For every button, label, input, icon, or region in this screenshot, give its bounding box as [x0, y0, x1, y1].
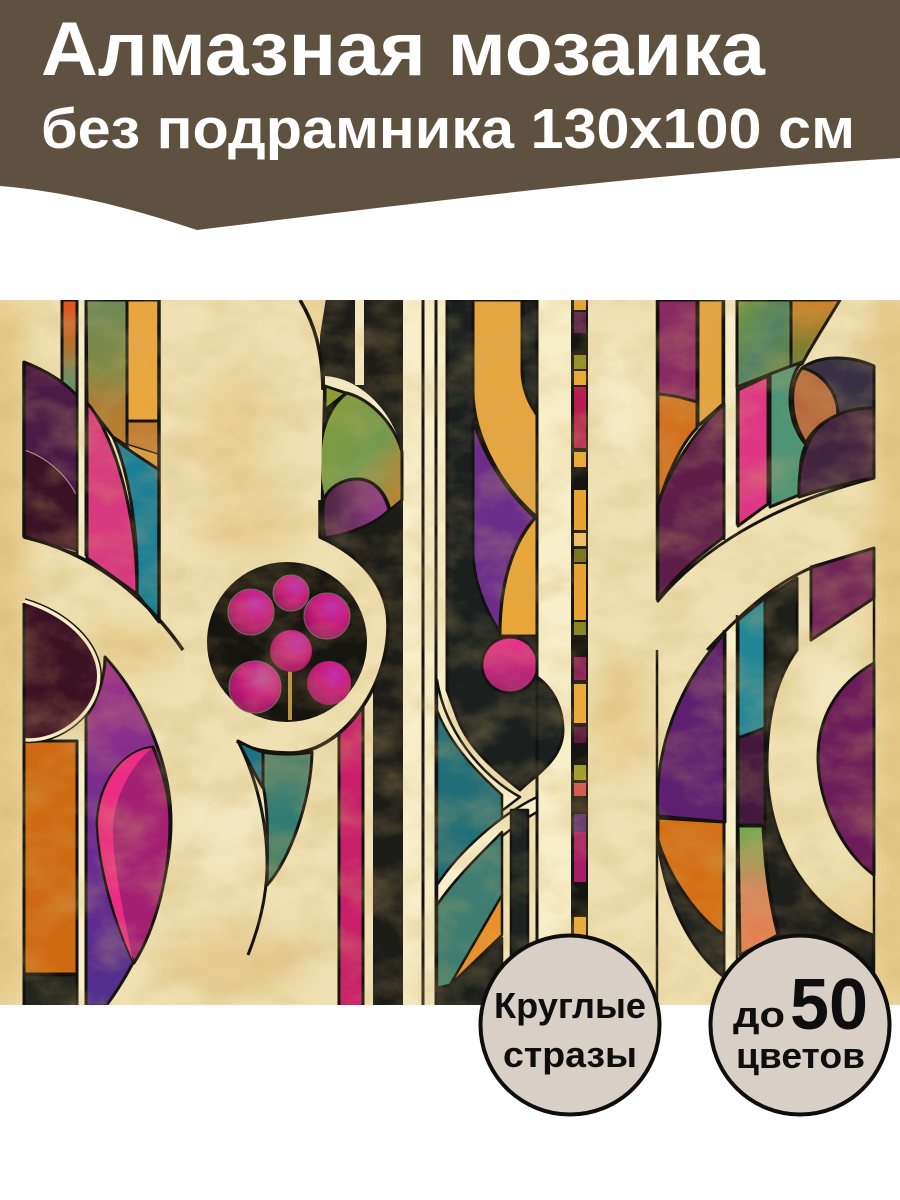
badge: round rhinestones: стразы — [503, 1034, 637, 1075]
centre lower teal and green panels — [437, 680, 537, 1010]
green arched shape with purple half-disc — [320, 376, 402, 538]
left cream panel fill — [318, 370, 323, 500]
badge: up to 50 colours: 50 — [790, 965, 868, 1045]
outlines of ring and cream panel — [24, 300, 388, 753]
badge: up to 50 colours: до — [733, 994, 785, 1035]
badge: round rhinestones: Круглые — [494, 985, 646, 1026]
berry stem — [288, 670, 292, 720]
cream ring around the berry medallion — [170, 539, 386, 732]
paper grain overlay — [0, 300, 900, 1005]
subtitle: без подрамника 130х100 см — [41, 97, 855, 161]
right lower shapes — [657, 300, 874, 1006]
badge: up to 50 colours: цветов — [736, 1035, 865, 1076]
berry medallion — [208, 563, 366, 721]
centre column — [447, 300, 563, 1005]
left column group: upper shapes — [24, 300, 159, 622]
title: Алмазная мозаика — [41, 7, 766, 92]
badge: round rhinestones — [480, 936, 660, 1114]
left column group: lower shapes — [24, 603, 171, 1010]
beaded mosaic strip — [571, 300, 588, 1005]
right upper shapes — [657, 300, 874, 602]
cream vertical strips — [77, 300, 737, 1005]
header banner — [0, 0, 900, 230]
artwork: stained-glass painting — [0, 298, 900, 1010]
leaf shape under ring — [238, 741, 312, 955]
thin vertical lines in centre — [423, 300, 436, 1005]
dark column with pink strip — [300, 298, 403, 1010]
badge: up to 50 colours — [710, 936, 890, 1114]
